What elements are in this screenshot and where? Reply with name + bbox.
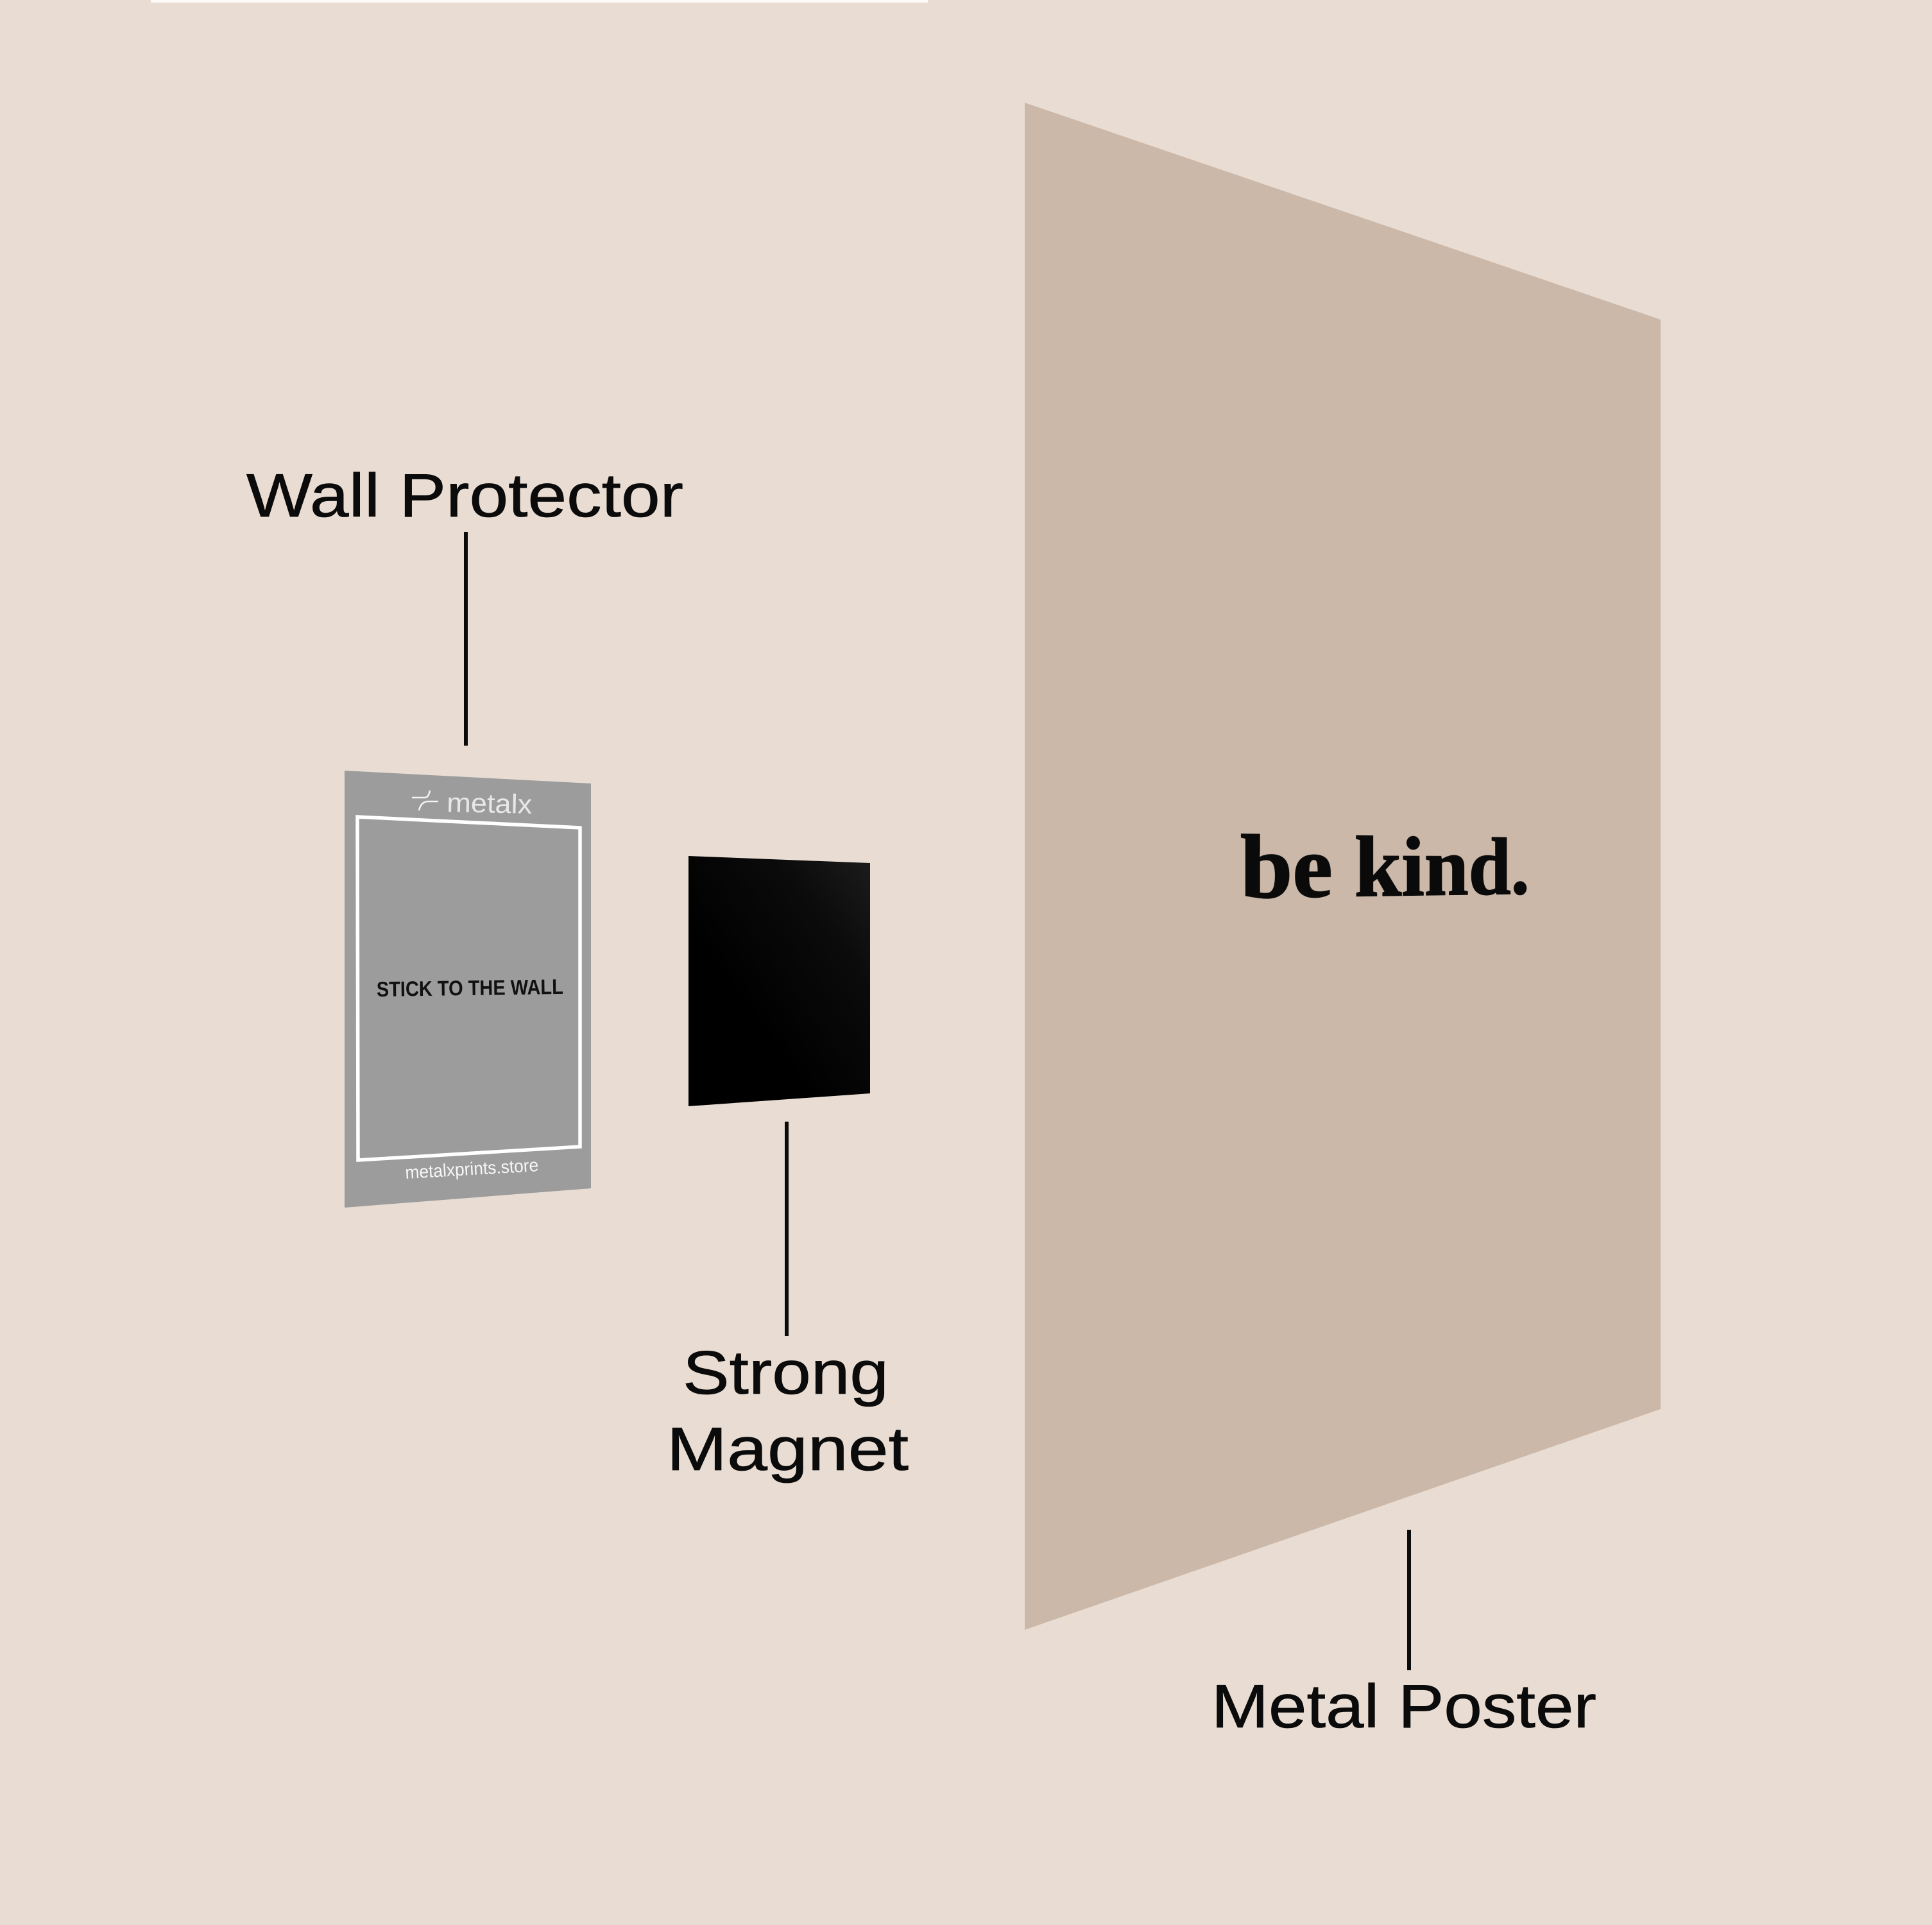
metalx logo text: metalx: [447, 787, 533, 819]
leader line: strong magnet: [785, 1122, 789, 1336]
icon: metalx logo mark: [412, 791, 438, 810]
second line: Magnet: [667, 1415, 909, 1484]
label: wall protector: Wall Protector: [246, 461, 683, 530]
label: strong magnet: [667, 1339, 909, 1484]
white strip at top edge: [151, 0, 928, 3]
panel: strong magnet: [688, 856, 870, 1106]
leader line: wall protector: [464, 532, 468, 746]
panel: metal poster: [1025, 103, 1661, 1630]
poster text: be kind: be kind.: [1240, 817, 1530, 918]
leader line: metal poster: [1407, 1530, 1411, 1670]
first line: Strong: [683, 1339, 889, 1407]
wall protector sheet: [345, 771, 591, 1208]
panel: wall protector: [345, 771, 591, 1208]
white frame: [357, 817, 580, 1160]
label: metal poster: Metal Poster: [1211, 1672, 1596, 1741]
instruction text: STICK TO THE WALL: [377, 975, 563, 1001]
store url: metalxprints.store: [405, 1155, 539, 1183]
